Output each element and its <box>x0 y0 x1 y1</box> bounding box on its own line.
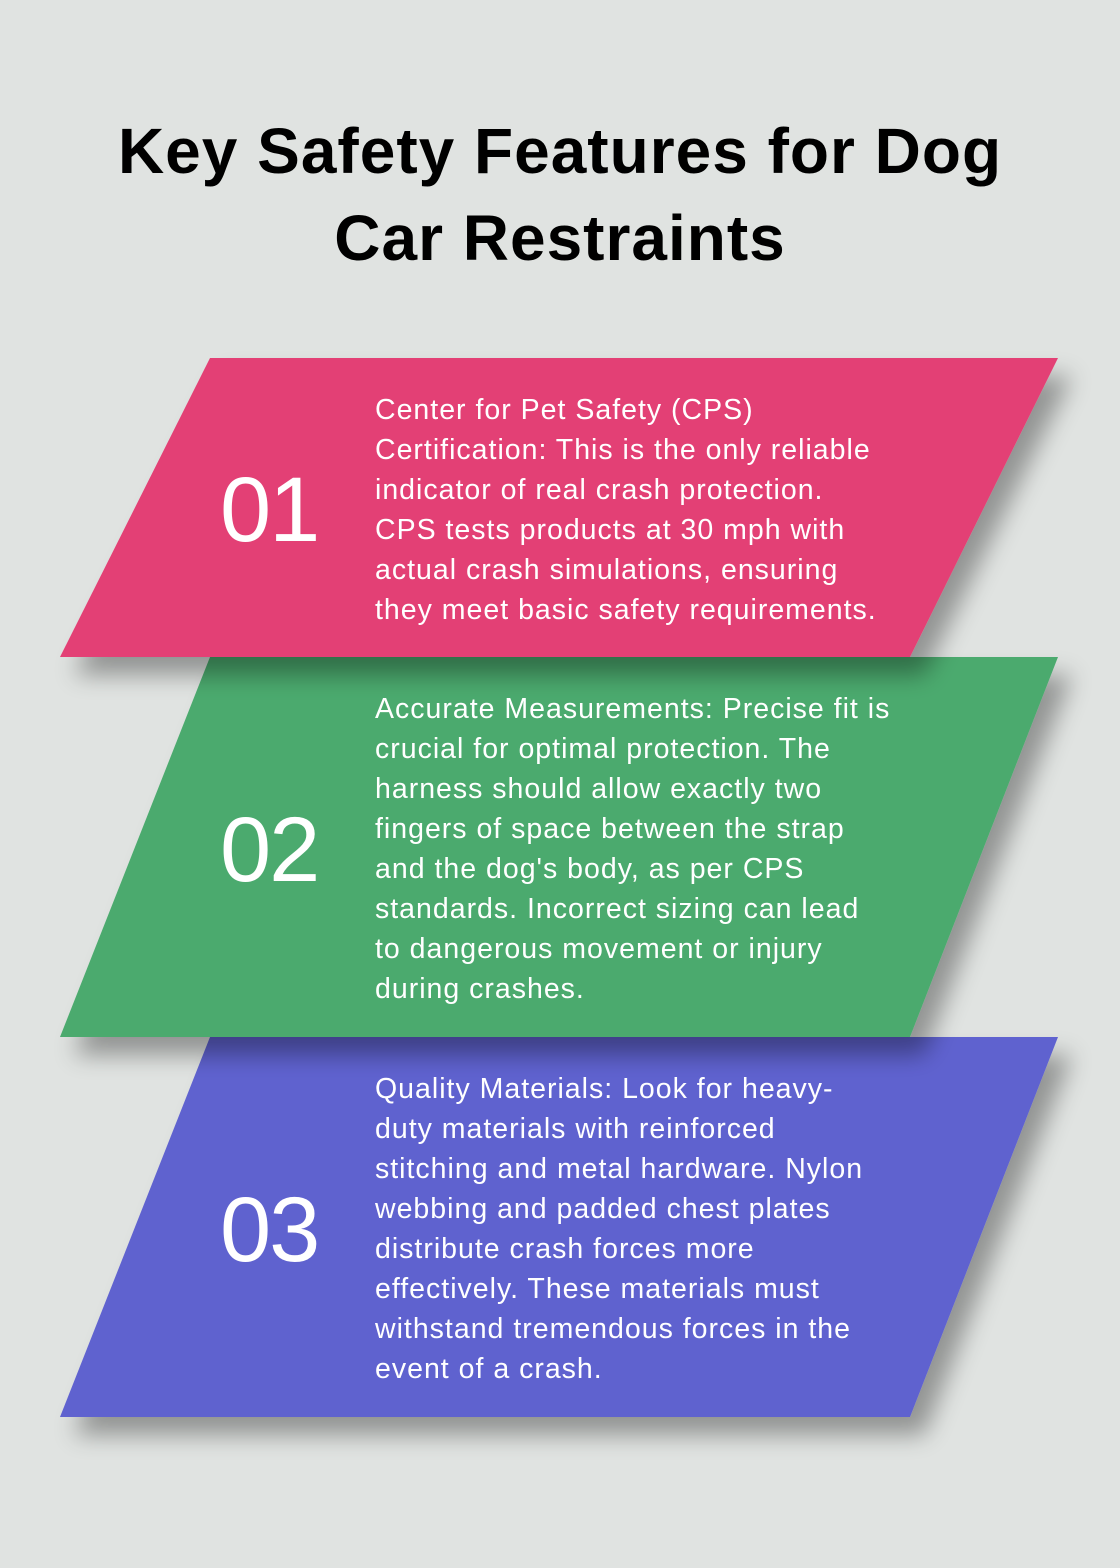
panel 3 number: 03 <box>220 1179 318 1281</box>
panel 3 text: Quality Materials: Look for heavy- <box>375 1073 834 1105</box>
panel 3 shape <box>60 1037 1058 1417</box>
panel 1 text: actual crash simulations, ensuring <box>375 554 838 586</box>
panel 2 number: 02 <box>220 799 318 901</box>
panel 1 text <box>375 394 877 626</box>
panel 1 text: indicator of real crash protection. <box>375 474 823 506</box>
panel 2 text: Accurate Measurements: Precise fit is <box>375 693 890 725</box>
panel 1 text: Certification: This is the only reliable <box>375 434 871 466</box>
panel 2 text: during crashes. <box>375 973 585 1005</box>
panel 1 number: 01 <box>220 459 318 561</box>
panel 3 text: webbing and padded chest plates <box>375 1193 831 1225</box>
title <box>118 115 1002 274</box>
panel 1 shape <box>60 358 1058 657</box>
panel 2 text: fingers of space between the strap <box>375 813 845 845</box>
title: Car Restraints <box>334 202 786 274</box>
panel 2 text: to dangerous movement or injury <box>375 933 823 965</box>
panel 1 text: CPS tests products at 30 mph with <box>375 514 845 546</box>
panel 3 text: stitching and metal hardware. Nylon <box>375 1153 863 1185</box>
panel 3 text: withstand tremendous forces in the <box>375 1313 851 1345</box>
panel 3 text <box>375 1073 863 1385</box>
panel 2 text: crucial for optimal protection. The <box>375 733 831 765</box>
title: Key Safety Features for Dog <box>118 115 1002 187</box>
panel 3 text: duty materials with reinforced <box>375 1113 776 1145</box>
panel 2 text <box>375 693 890 1005</box>
panel 2 text: standards. Incorrect sizing can lead <box>375 893 859 925</box>
panel 3 text: effectively. These materials must <box>375 1273 820 1305</box>
panel 1 text: Center for Pet Safety (CPS) <box>375 394 754 426</box>
panel 2 text: and the dog's body, as per CPS <box>375 853 804 885</box>
panel 2 text: harness should allow exactly two <box>375 773 822 805</box>
panel 3 text: distribute crash forces more <box>375 1233 755 1265</box>
panel 2 shape <box>60 657 1058 1037</box>
panel 3 text: event of a crash. <box>375 1353 603 1385</box>
panel 1 text: they meet basic safety requirements. <box>375 594 877 626</box>
